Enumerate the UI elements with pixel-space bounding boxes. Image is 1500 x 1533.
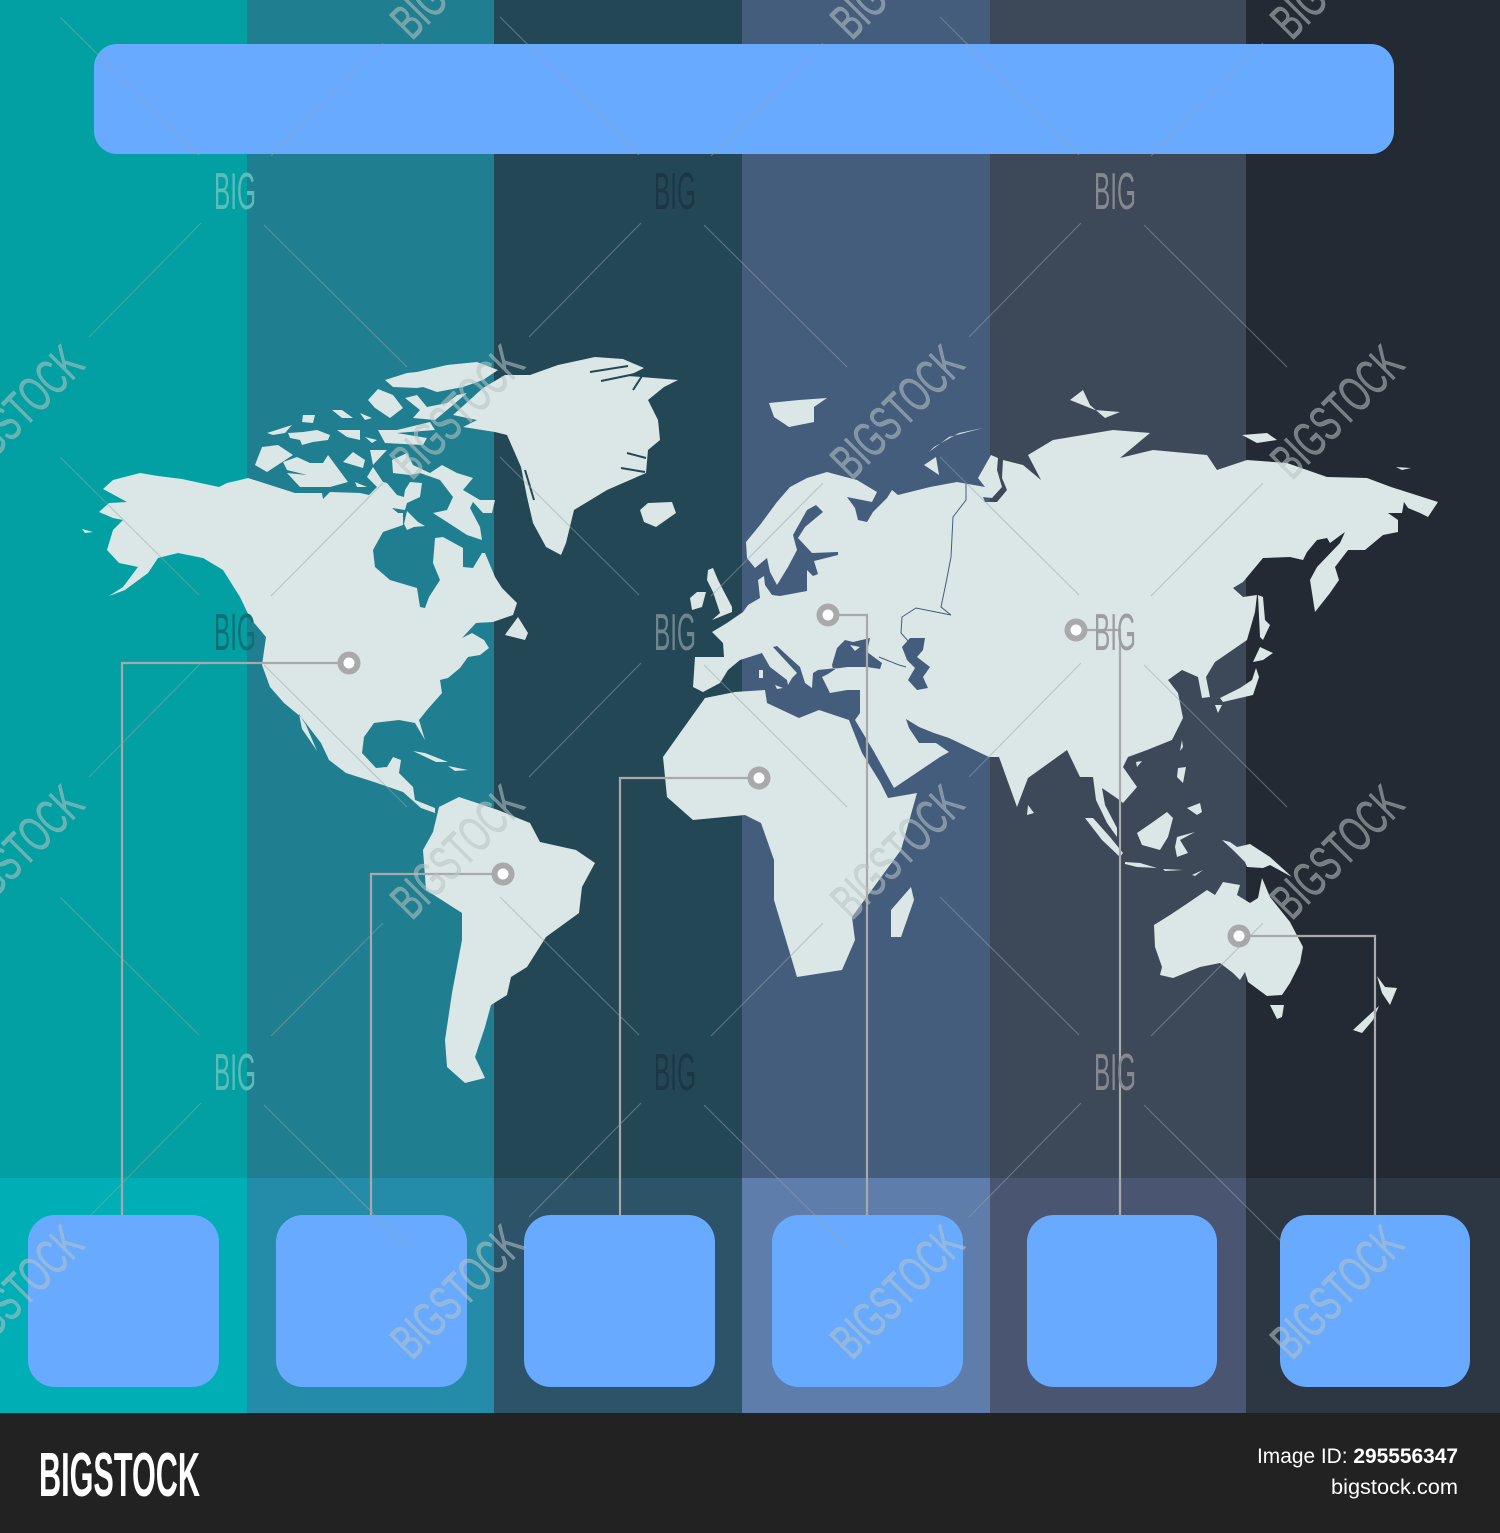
watermark diagonal lines bbox=[60, 17, 1287, 1247]
watermark BIGSTOCK labels: BIGSTOCK bbox=[380, 775, 534, 929]
info box 1 bbox=[28, 1215, 219, 1387]
Newfoundland and Alaska islands bbox=[82, 529, 528, 640]
watermark BIGSTOCK labels: BIGSTOCK bbox=[380, 1215, 534, 1369]
infographic canvas: BIG bbox=[1094, 1044, 1136, 1102]
connector: North America bbox=[122, 654, 358, 1215]
European and Arctic islands bbox=[690, 390, 1411, 689]
watermark BIGSTOCK labels: BIGSTOCK bbox=[1260, 1215, 1414, 1369]
watermark BIG labels: BIG bbox=[214, 1044, 256, 1102]
Southeast Asia islands bbox=[1027, 740, 1292, 877]
world map bbox=[82, 357, 1438, 1083]
connector: Australia bbox=[1230, 928, 1375, 1215]
Australia bbox=[1154, 878, 1303, 996]
connector: Asia bbox=[1068, 622, 1120, 1215]
watermark BIGSTOCK labels: BIGSTOCK bbox=[820, 1215, 974, 1369]
infographic canvas: BIG bbox=[1094, 604, 1136, 662]
footer bar: BIGSTOCK bbox=[39, 1441, 200, 1510]
Arctic islands bbox=[255, 362, 498, 540]
watermark BIGSTOCK labels: BIGSTOCK bbox=[820, 775, 974, 929]
connector: Europe bbox=[820, 606, 867, 1215]
info box 6 bbox=[1280, 1215, 1470, 1387]
watermark BIG labels: BIG bbox=[214, 163, 256, 221]
Japan and Sakhalin bbox=[1215, 595, 1273, 713]
Europe-Asia border bbox=[879, 483, 966, 667]
title bar bbox=[94, 44, 1394, 154]
Madagascar bbox=[891, 887, 914, 937]
connector: South America bbox=[371, 866, 512, 1215]
infographic canvas: BIG bbox=[1094, 163, 1136, 221]
Greenland bbox=[453, 357, 678, 555]
info box 2 bbox=[276, 1215, 467, 1387]
South America bbox=[423, 797, 595, 1083]
watermark BIG labels bbox=[214, 163, 1136, 1102]
New Zealand bbox=[1353, 976, 1397, 1033]
North America bbox=[99, 467, 517, 813]
site name: bigstock.com bbox=[1331, 1476, 1458, 1499]
Tasmania bbox=[1270, 1005, 1284, 1019]
watermark BIGSTOCK labels: BIGSTOCK bbox=[820, 335, 974, 489]
watermark BIGSTOCK labels: BIGSTOCK bbox=[1260, 775, 1414, 929]
watermark BIG labels: BIG bbox=[654, 1044, 696, 1102]
Eurasia bbox=[693, 430, 1438, 837]
info box 3 bbox=[524, 1215, 715, 1387]
watermark BIG labels: BIG bbox=[214, 604, 256, 662]
connector: Africa bbox=[620, 770, 768, 1215]
watermark BIGSTOCK labels: BIGSTOCK bbox=[380, 335, 534, 489]
watermark BIG labels: BIG bbox=[654, 604, 696, 662]
watermark BIGSTOCK labels: BIGSTOCK bbox=[1260, 335, 1414, 489]
image id: Image ID: 295556347 bbox=[1257, 1445, 1458, 1468]
info box 5 bbox=[1027, 1215, 1217, 1387]
Greenland fjords bbox=[525, 366, 646, 500]
info box 4 bbox=[772, 1215, 963, 1387]
watermark BIG labels: BIG bbox=[654, 163, 696, 221]
Africa bbox=[663, 690, 917, 977]
Caribbean islands bbox=[413, 751, 468, 771]
footer bar bbox=[0, 1413, 1500, 1533]
Iceland bbox=[640, 502, 676, 527]
